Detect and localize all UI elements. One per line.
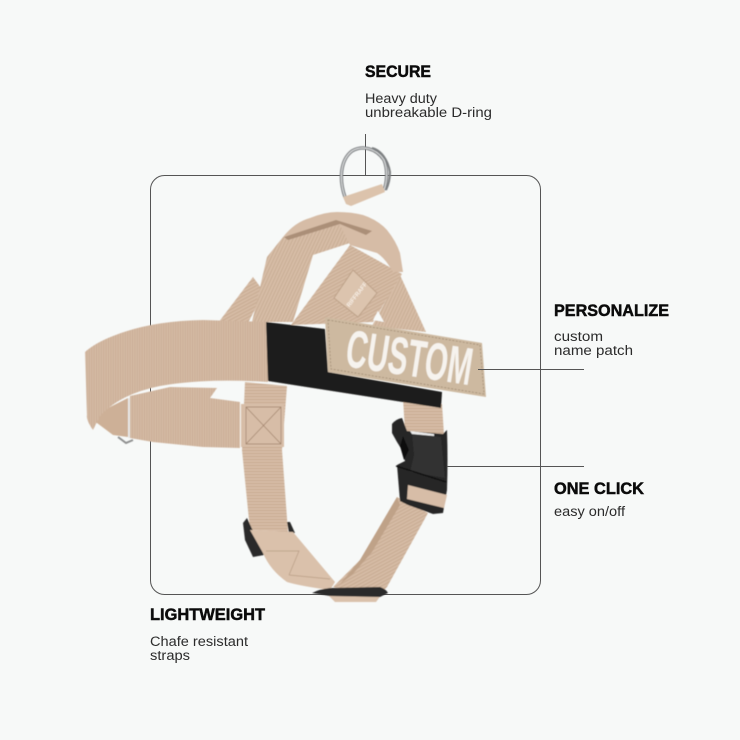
callout: lightweight: straps <box>150 648 190 663</box>
d-ring <box>341 148 390 206</box>
top loop <box>283 212 403 272</box>
vertical front strap <box>242 382 288 532</box>
inner collar shadow <box>90 398 128 437</box>
brand tag diamond: RIFFRAFF <box>346 282 369 309</box>
harness illustration <box>85 148 486 602</box>
left black slider <box>243 518 295 557</box>
callout: personalize <box>554 301 669 358</box>
callout: one click: easy on/off <box>554 504 625 519</box>
secure leader line <box>364 134 366 175</box>
stitched square <box>241 404 284 447</box>
callout: personalize: name patch <box>554 343 633 358</box>
callout: one click: ONE CLICK <box>554 479 645 498</box>
callout: lightweight: LIGHTWEIGHT <box>150 605 266 624</box>
callout: personalize: PERSONALIZE <box>554 301 669 320</box>
bottom black slider <box>312 587 388 597</box>
collar band <box>85 320 268 430</box>
callout: one click <box>554 479 645 519</box>
right shoulder strap <box>372 275 426 332</box>
left shoulder strap <box>252 223 350 322</box>
bottom tan piece <box>327 594 382 602</box>
callout: secure: Heavy duty <box>365 91 437 106</box>
metal slider <box>118 398 133 443</box>
one click leader line <box>447 466 584 468</box>
strap fold <box>340 497 400 584</box>
far back strap <box>218 277 264 323</box>
personalize leader line <box>478 368 584 370</box>
custom name patch: CUSTOM <box>342 320 477 397</box>
custom name patch <box>325 317 486 397</box>
callout: secure <box>365 62 492 120</box>
brand tag diamond <box>334 270 377 317</box>
strap through buckle <box>407 485 447 508</box>
lower left strap <box>250 530 335 590</box>
white gap <box>373 311 384 322</box>
strap above buckle <box>403 398 444 435</box>
under collar band <box>130 387 240 448</box>
callout: secure: unbreakable D-ring <box>365 105 492 120</box>
loop slit shadow <box>284 220 372 240</box>
lower right strap <box>333 497 428 598</box>
callout: secure: SECURE <box>365 62 431 81</box>
velcro black panel <box>266 322 442 408</box>
outline frame <box>150 176 540 594</box>
callout: lightweight: Chafe resistant <box>150 634 248 649</box>
black buckle <box>392 418 448 514</box>
callout: personalize: custom <box>554 329 603 344</box>
callout: lightweight <box>150 605 266 663</box>
center chest strap <box>291 245 402 325</box>
